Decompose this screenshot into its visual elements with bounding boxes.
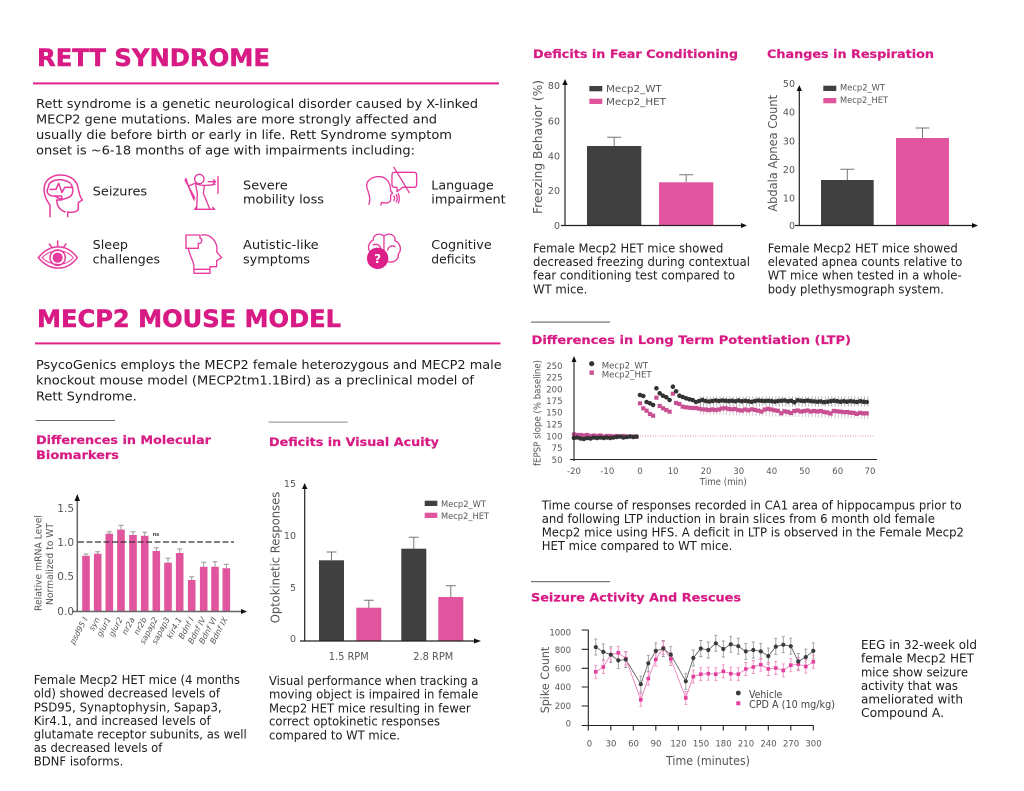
heading: visual acuity: Deficits in Visual Acuity	[269, 435, 439, 449]
scatter chart: LTP time course: 40	[766, 467, 777, 477]
caption: biomarkers: old) showed decreased levels of	[34, 687, 221, 701]
line chart: spike count	[538, 628, 835, 768]
bar chart: relative mRNA levels: 0.0	[57, 606, 74, 618]
bar chart: apnea count: 50	[783, 79, 795, 90]
text block: Rett syndrome intro: MECP2 gene mutations. Males are more strongly affected and	[36, 111, 437, 126]
caption: visual acuity: Visual performance when tracking a	[269, 674, 478, 688]
bar chart: freezing behavior: Freezing Behavior (%)	[531, 80, 545, 214]
bar chart: relative mRNA levels: Bdnf VI	[197, 615, 219, 645]
line chart: spike count: 120	[670, 740, 687, 750]
label: language impairment: impairment	[431, 191, 506, 206]
scatter chart: LTP time course: fEPSP slope (% baseline)	[532, 360, 544, 466]
text block: mouse model intro: knockout mouse model (MECP2tm1.1Bird) as a preclinical model of	[36, 373, 475, 388]
bar chart: apnea count: Abdala Apnea Count	[766, 95, 780, 212]
bar chart: optokinetic responses: Mecp2_HET	[441, 512, 489, 522]
line chart: spike count: 30	[606, 740, 616, 750]
caption: biomarkers: Female Mecp2 HET mice (4 months	[34, 673, 240, 687]
scatter chart: LTP time course: -20	[567, 467, 581, 477]
label: language impairment	[431, 177, 506, 206]
bar chart: optokinetic responses: 0	[290, 634, 296, 645]
label: cognitive deficits	[431, 237, 492, 266]
label: cognitive deficits: deficits	[431, 251, 476, 266]
scatter chart: LTP time course: 200	[546, 386, 562, 396]
bar chart: optokinetic responses: Optokinetic Responses	[269, 492, 283, 623]
heading: seizure activity: Seizure Activity And Rescues	[531, 591, 741, 605]
scatter chart: LTP time course: 250	[546, 362, 562, 372]
bar chart: apnea count: 10	[783, 194, 795, 204]
bar chart: relative mRNA levels: sapap3	[150, 616, 172, 646]
caption: EEG seizure activity: Compound A.	[861, 706, 944, 720]
heading: fear conditioning: Deficits in Fear Conditioning	[533, 47, 738, 61]
bar chart: relative mRNA levels: Bdnf I	[177, 615, 196, 641]
bar chart: relative mRNA levels: Relative mRNA Level	[34, 515, 44, 611]
caption: biomarkers: Kir4.1, and increased levels of	[34, 714, 211, 728]
title: Rett Syndrome: RETT SYNDROME	[37, 44, 270, 72]
line chart: spike count: 210	[738, 740, 754, 750]
caption: visual acuity: Mecp2 HET mice resulting in fewer	[269, 701, 471, 715]
heading: LTP: Differences in Long Term Potentiation (LTP)	[532, 333, 851, 347]
bar chart: relative mRNA levels: psd95 I	[68, 615, 90, 647]
bar chart: freezing behavior: 20	[548, 186, 560, 197]
line chart: spike count: 200	[555, 702, 571, 712]
label: sleep challenges: challenges	[93, 251, 160, 266]
line chart: spike count: 240	[760, 740, 777, 750]
bar chart: freezing behavior: 0	[554, 221, 560, 232]
line chart: spike count: 90	[651, 740, 661, 750]
caption: EEG seizure activity: mice show seizure	[861, 665, 968, 679]
scatter chart: LTP time course: 225	[546, 374, 562, 384]
line chart: spike count: Vehicle	[749, 689, 782, 701]
bar chart: freezing behavior	[531, 79, 747, 232]
caption: EEG seizure activity: activity that was	[861, 679, 958, 693]
caption: LTP: HET mice compared to WT mice.	[542, 539, 732, 553]
scatter chart: LTP time course: 125	[546, 420, 562, 430]
heading: molecular biomarkers: Differences in Molecular	[36, 433, 211, 447]
bar chart: relative mRNA levels: nr2a	[120, 616, 137, 636]
bar chart: freezing behavior: Mecp2_WT	[606, 84, 663, 95]
bar chart: relative mRNA levels: sapap2	[138, 616, 160, 646]
bar chart: apnea count: 30	[783, 136, 795, 148]
line chart: spike count: 400	[555, 683, 571, 693]
caption: respiration	[768, 241, 962, 296]
bar chart: relative mRNA levels: syn	[87, 616, 102, 632]
label: sleep challenges: Sleep	[93, 237, 128, 252]
line chart: spike count: Spike Count	[538, 646, 552, 713]
bar chart: relative mRNA levels: 1.5	[57, 503, 74, 515]
text block: Rett syndrome intro: onset is ~6-18 months of age with impairments including:	[36, 142, 415, 157]
caption: LTP: Time course of responses recorded in CA1 area of hippocampus prior to	[541, 498, 962, 512]
title: MECP2 mouse model: MECP2 MOUSE MODEL	[37, 305, 341, 333]
text block: Rett syndrome intro	[36, 96, 478, 157]
label: autistic-like symptoms: Autistic-like	[243, 237, 319, 252]
bar chart: freezing behavior: 60	[548, 116, 560, 128]
scatter chart: LTP time course: Mecp2_WT	[602, 361, 649, 371]
icon: brain with question mark	[368, 234, 400, 268]
caption: visual acuity: correct optokinetic responses	[269, 715, 440, 729]
bar chart: relative mRNA levels: Normalized to WT	[45, 522, 56, 605]
bar chart: optokinetic responses: Mecp2_WT	[441, 500, 486, 510]
caption: EEG seizure activity: ameliorated with	[861, 692, 963, 706]
label: severe mobility loss: mobility loss	[243, 191, 324, 206]
scatter chart: LTP time course: 30	[733, 467, 744, 477]
caption: biomarkers: glutamate receptor subunits, as well	[34, 728, 247, 742]
label: autistic-like symptoms	[243, 237, 319, 266]
label: severe mobility loss	[243, 177, 324, 206]
bar chart: apnea count: Mecp2_WT	[840, 84, 885, 94]
bar chart: optokinetic responses: 10	[284, 531, 296, 542]
caption: EEG seizure activity: EEG in 32-week old	[861, 638, 977, 652]
caption: fear conditioning: Female Mecp2 HET mice showed	[533, 241, 723, 255]
scatter chart: LTP time course: Time (min)	[699, 477, 747, 488]
caption: biomarkers: BDNF isoforms.	[34, 755, 123, 769]
scatter chart: LTP time course	[532, 356, 877, 488]
icon: brain with question mark: ?	[374, 252, 381, 266]
caption: biomarkers: as decreased levels of	[34, 741, 163, 755]
scatter chart: LTP time course: Mecp2_HET	[602, 371, 652, 381]
symptom grid	[38, 167, 506, 273]
scatter chart: LTP time course: 70	[865, 467, 875, 477]
caption: LTP: Mecp2 mice using HFS. A deficit in LTP is observed in the Female Mecp2	[542, 526, 964, 540]
bar chart: optokinetic responses: 2.8 RPM	[413, 651, 453, 663]
caption: biomarkers	[34, 673, 247, 769]
bar chart: relative mRNA levels: 1.0	[57, 537, 74, 549]
scatter chart: LTP time course: 50	[552, 456, 562, 466]
caption: EEG seizure activity: female Mecp2 HET	[861, 652, 975, 666]
caption: fear conditioning	[533, 241, 750, 296]
label: sleep challenges	[93, 237, 160, 266]
label: language impairment: Language	[431, 177, 494, 192]
caption: visual acuity: compared to WT mice.	[269, 728, 400, 742]
icon: mobility figure	[185, 174, 218, 209]
bar chart: relative mRNA levels: 0.5	[57, 571, 74, 583]
heading: respiration: Changes in Respiration	[767, 47, 934, 61]
caption: visual acuity	[269, 674, 478, 742]
line chart: spike count: 150	[693, 740, 709, 750]
caption: visual acuity: moving object is impaired in female	[269, 688, 478, 702]
text block: Rett syndrome intro: usually die before birth or early in life. Rett Syndrome symptom	[36, 127, 452, 142]
line chart: spike count: 60	[628, 740, 639, 750]
scatter chart: LTP time course: 50	[799, 467, 810, 477]
bar chart: relative mRNA levels: ns	[153, 532, 159, 538]
line chart: spike count: 270	[783, 740, 799, 750]
label: cognitive deficits: Cognitive	[431, 237, 492, 252]
bar chart: optokinetic responses: 15	[284, 479, 296, 490]
scatter chart: LTP time course: 60	[832, 467, 843, 477]
text block: mouse model intro	[36, 357, 502, 403]
bar chart: relative mRNA levels: nr2b	[132, 616, 149, 636]
bar chart: relative mRNA levels: Bdnf IV	[186, 615, 208, 645]
icon: seizures head	[44, 175, 82, 217]
line chart: spike count: 600	[555, 664, 571, 674]
caption: respiration: WT mice when tested in a whole-	[768, 269, 962, 283]
label: seizures: Seizures	[93, 184, 147, 199]
line chart: spike count: 0	[587, 740, 592, 750]
line chart: spike count: Time (minutes)	[665, 754, 750, 768]
bar chart: optokinetic responses: 5	[290, 583, 296, 594]
scatter chart: LTP time course: 175	[546, 397, 562, 407]
heading: molecular biomarkers	[36, 433, 211, 462]
bar chart: relative mRNA levels: glur2	[107, 616, 125, 638]
line chart: spike count: 800	[555, 646, 571, 656]
bar chart: relative mRNA levels: glur1	[95, 616, 113, 638]
bar chart: optokinetic responses: 1.5 RPM	[329, 651, 369, 663]
label: autistic-like symptoms: symptoms	[243, 251, 310, 266]
text block: mouse model intro: PsycoGenics employs the MECP2 female heterozygous and MECP2 male	[36, 357, 502, 372]
label: severe mobility loss: Severe	[243, 177, 288, 192]
bar chart: apnea count: 40	[783, 108, 795, 118]
icon: speech impairment	[367, 167, 417, 205]
caption: respiration: Female Mecp2 HET mice showed	[768, 241, 958, 255]
bar chart: apnea count	[766, 79, 978, 232]
icon: head with puzzle	[186, 235, 222, 273]
bar chart: apnea count: 20	[783, 165, 795, 176]
caption: fear conditioning: fear conditioning test compared to	[533, 269, 735, 283]
bar chart: relative mRNA levels	[34, 494, 247, 647]
scatter chart: LTP time course: 10	[668, 467, 678, 477]
caption: respiration: elevated apnea counts relative to	[768, 255, 962, 269]
bar chart: relative mRNA levels: kir4.1	[165, 616, 184, 640]
line chart: spike count: 300	[805, 740, 822, 750]
line chart: spike count: 0	[566, 720, 571, 730]
bar chart: freezing behavior: Mecp2_HET	[606, 97, 667, 108]
caption: biomarkers: PSD95, Synaptophysin, Sapap3,	[34, 701, 222, 715]
text block: Rett syndrome intro: Rett syndrome is a genetic neurological disorder caused by X-linked	[36, 96, 478, 111]
caption: fear conditioning: decreased freezing during contextual	[533, 255, 750, 269]
line chart: spike count: 180	[715, 740, 732, 750]
bar chart: optokinetic responses	[269, 479, 489, 663]
bar chart: freezing behavior: 80	[548, 81, 560, 92]
bar chart: apnea count: Mecp2_HET	[840, 96, 888, 106]
caption: respiration: body plethysmograph system.	[768, 282, 944, 296]
caption: EEG seizure activity	[861, 638, 977, 720]
icon: eye	[38, 241, 77, 268]
line chart: spike count: CPD A (10 mg/kg)	[749, 699, 835, 711]
scatter chart: LTP time course: 75	[552, 444, 562, 454]
scatter chart: LTP time course: 20	[701, 467, 711, 477]
scatter chart: LTP time course: 100	[546, 432, 562, 442]
bar chart: freezing behavior: 40	[548, 152, 560, 162]
scatter chart: LTP time course: 0	[637, 467, 643, 477]
scatter chart: LTP time course: -10	[600, 467, 614, 477]
line chart: spike count: 1000	[549, 628, 571, 638]
heading: molecular biomarkers: Biomarkers	[36, 448, 119, 462]
text block: mouse model intro: Rett Syndrome.	[36, 388, 137, 403]
scatter chart: LTP time course: 150	[546, 408, 562, 418]
caption: LTP: and following LTP induction in brain slices from 6 month old female	[542, 512, 935, 526]
bar chart: relative mRNA levels: Bdnf IX	[208, 615, 230, 645]
bar chart: apnea count: 0	[789, 221, 795, 232]
caption: fear conditioning: WT mice.	[533, 282, 587, 296]
caption: LTP	[541, 498, 964, 553]
